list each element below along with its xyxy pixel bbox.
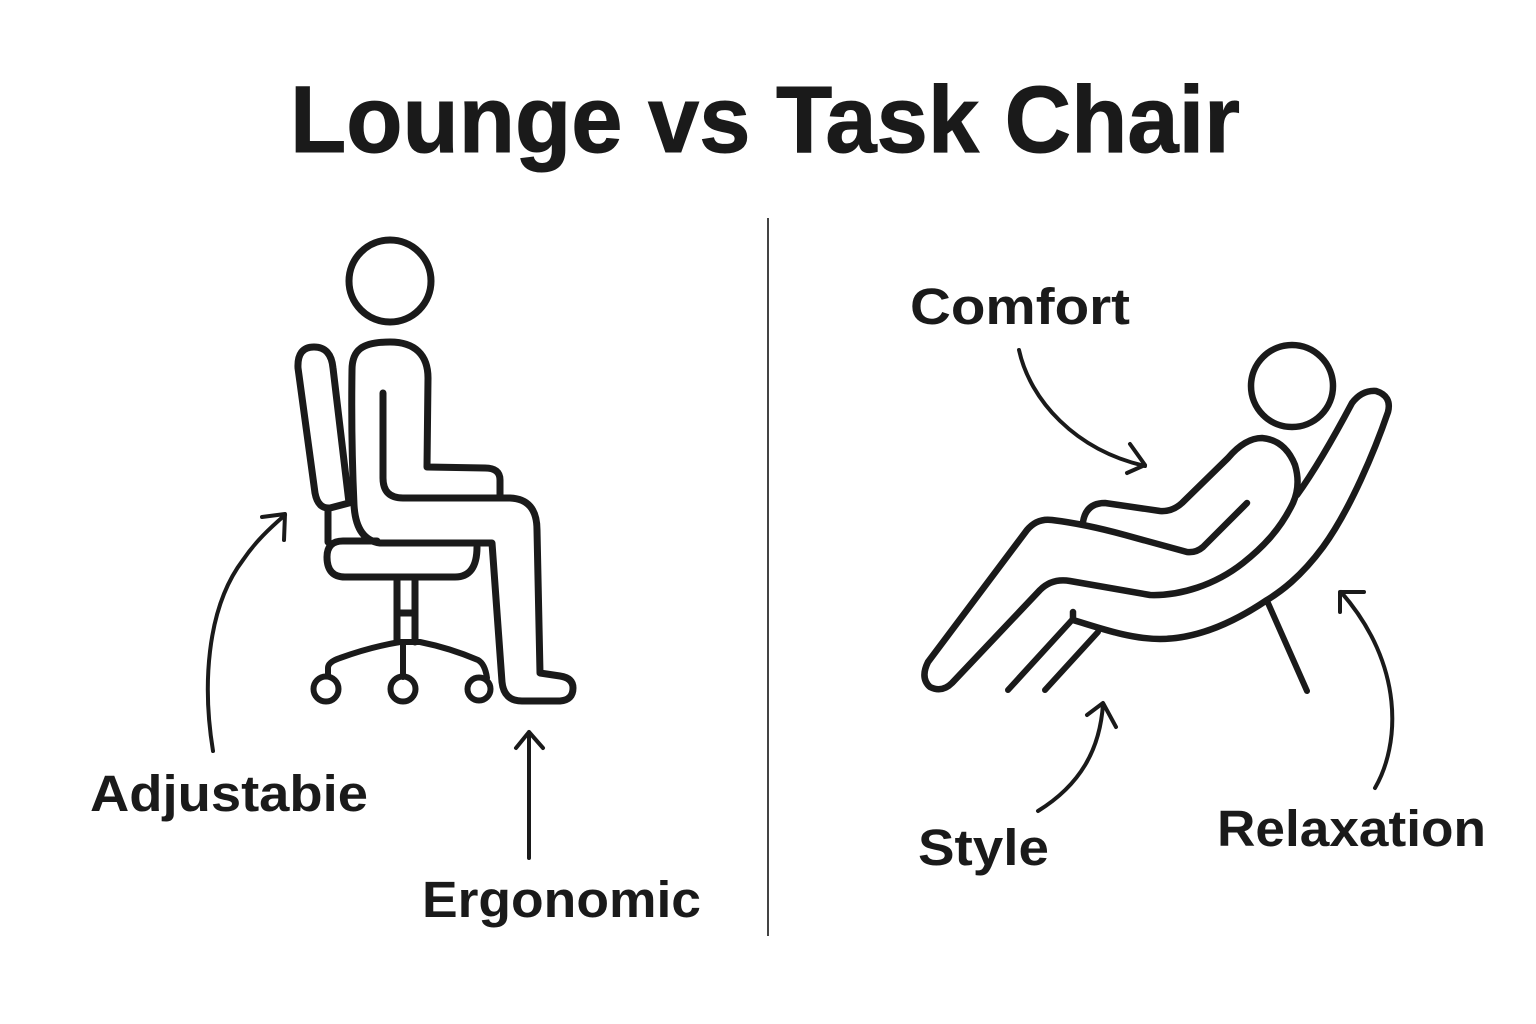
chair back <box>298 347 349 508</box>
center divider <box>767 218 769 936</box>
label: style: Style <box>918 819 1049 876</box>
chair base and wheels <box>314 642 490 702</box>
label: ergonomic: Ergonomic <box>422 871 701 928</box>
chair shell <box>1073 391 1389 639</box>
label: adjustable: Adjustabie <box>90 765 368 822</box>
torso and legs <box>924 438 1298 689</box>
title: Lounge vs Task Chair <box>290 67 1240 173</box>
label: comfort: Comfort <box>910 278 1130 335</box>
front legs <box>1008 620 1098 690</box>
arrow: relaxation <box>1340 592 1392 788</box>
chair seat <box>327 508 477 577</box>
body and leg <box>352 342 573 701</box>
head <box>1251 345 1333 427</box>
arrow: adjustable <box>208 514 285 751</box>
rear leg <box>1268 603 1307 691</box>
head <box>349 240 431 322</box>
chair stem <box>397 578 415 642</box>
lounge chair figure <box>924 345 1389 691</box>
arrow: ergonomic <box>516 732 543 858</box>
task chair figure <box>298 240 573 702</box>
arrow: comfort <box>1019 350 1145 473</box>
label: relaxation: Relaxation <box>1217 800 1486 857</box>
arrow: style <box>1038 703 1116 811</box>
